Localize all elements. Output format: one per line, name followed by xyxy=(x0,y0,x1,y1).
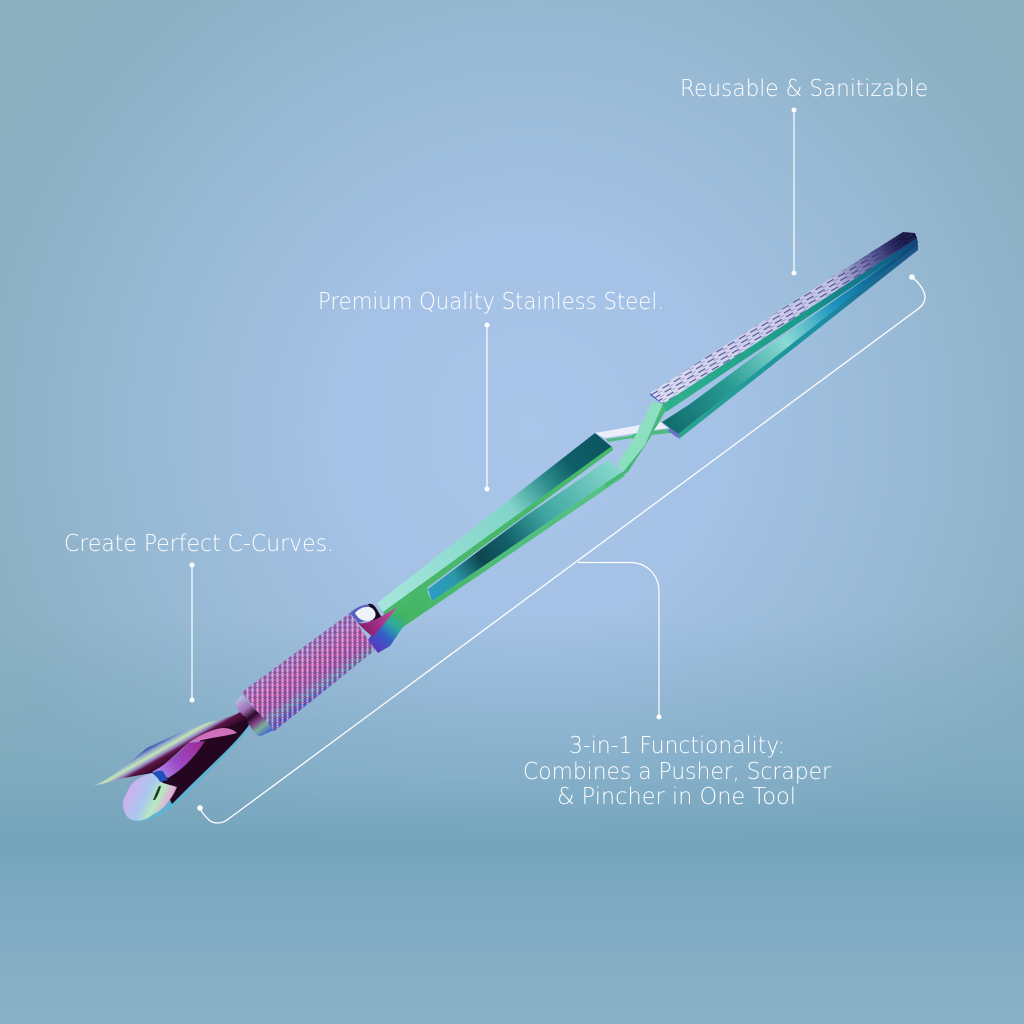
bracket line along tool length xyxy=(197,274,925,823)
callout: 3-in-1 Functionality: 3-in-1 Functionality: xyxy=(569,733,785,759)
tool: scraper strip xyxy=(663,238,918,412)
callout: Reusable & Sanitizable xyxy=(680,76,928,276)
tool: pincher lower arm xyxy=(368,460,625,653)
callout: 3-in-1 Functionality: & Pincher in One Tool xyxy=(557,784,796,810)
callout: 3-in-1 Functionality: Combines a Pusher, Scraper xyxy=(523,759,832,785)
callout: Reusable & Sanitizable: Reusable & Sanitizable xyxy=(680,76,928,102)
tool: collar xyxy=(235,695,274,736)
callout: Premium Quality Stainless Steel: Premium Quality Stainless Steel. xyxy=(318,289,664,315)
tool: scraper inner face xyxy=(662,243,918,439)
tool: textured scraper top xyxy=(650,232,917,404)
tool: pusher and cuticle spoon xyxy=(93,712,251,821)
callout: Create Perfect C-Curves: Create Perfect C-Curves. xyxy=(64,531,334,557)
tool: three-in-one nail tool xyxy=(93,232,918,821)
callout: Premium Quality Stainless Steel xyxy=(318,289,664,492)
tool: knurled handle xyxy=(242,613,375,732)
callout: Create Perfect C-Curves xyxy=(64,531,334,702)
tool: crossing bridge xyxy=(595,402,672,487)
tool: pincher upper arm xyxy=(377,433,613,618)
tool: handle cap xyxy=(350,604,397,637)
callout: 3-in-1 Functionality xyxy=(523,562,832,810)
